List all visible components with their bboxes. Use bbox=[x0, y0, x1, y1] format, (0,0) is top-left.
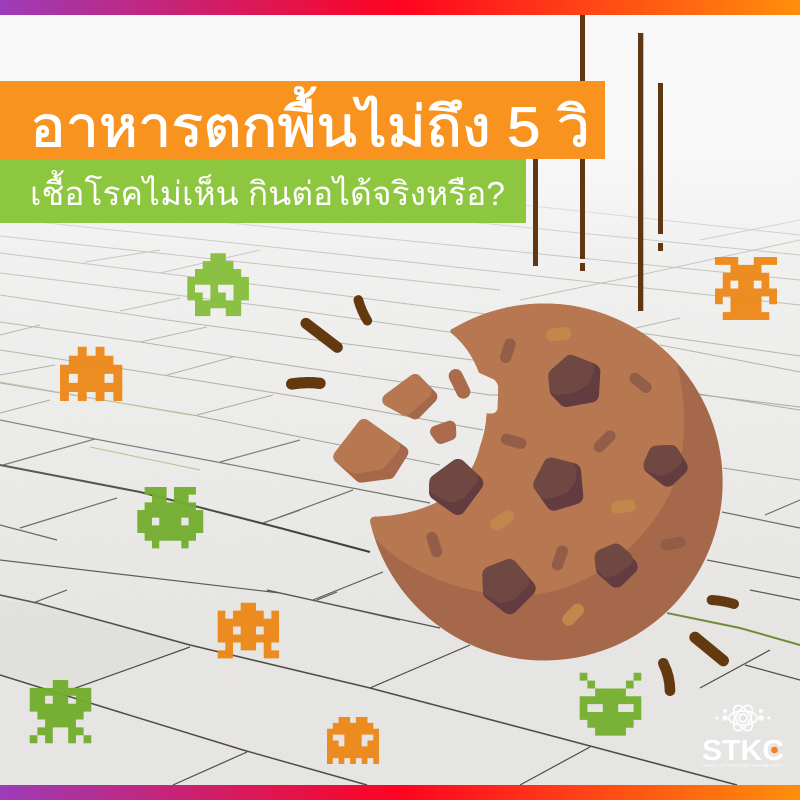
icon: orange invader, crab bbox=[218, 603, 279, 658]
bottom gradient bar bbox=[0, 785, 800, 800]
subtitle banner bbox=[0, 159, 526, 223]
icon: orange invader, crown bbox=[60, 347, 122, 401]
icon: orange invader, ghost bbox=[327, 717, 379, 764]
subtitle banner: เชื้อโรคไม่เห็น กินต่อได้จริงหรือ? bbox=[30, 170, 505, 212]
bitten cookie bbox=[370, 304, 723, 660]
title banner: อาหารตกพื้นไม่ถึง 5 วิ bbox=[30, 87, 590, 158]
icon: green invader, dome bbox=[187, 253, 249, 316]
icon: green invader, legged bbox=[30, 680, 91, 743]
impact marks, lower right bbox=[663, 600, 734, 691]
icon: green invader, antennae bbox=[580, 673, 641, 736]
logo: STKC bbox=[702, 702, 784, 768]
impact marks, upper left bbox=[292, 300, 367, 384]
top gradient bar bbox=[0, 0, 800, 15]
logo: STKC: Science and Technology Knowledge Center bbox=[703, 764, 784, 768]
icon: green invader, horned bbox=[137, 487, 203, 548]
falling motion lines bbox=[533, 15, 663, 311]
logo: STKC: STKC bbox=[702, 735, 784, 767]
icon: orange invader, top right bbox=[715, 257, 777, 320]
cookie crumbs bbox=[340, 376, 463, 476]
